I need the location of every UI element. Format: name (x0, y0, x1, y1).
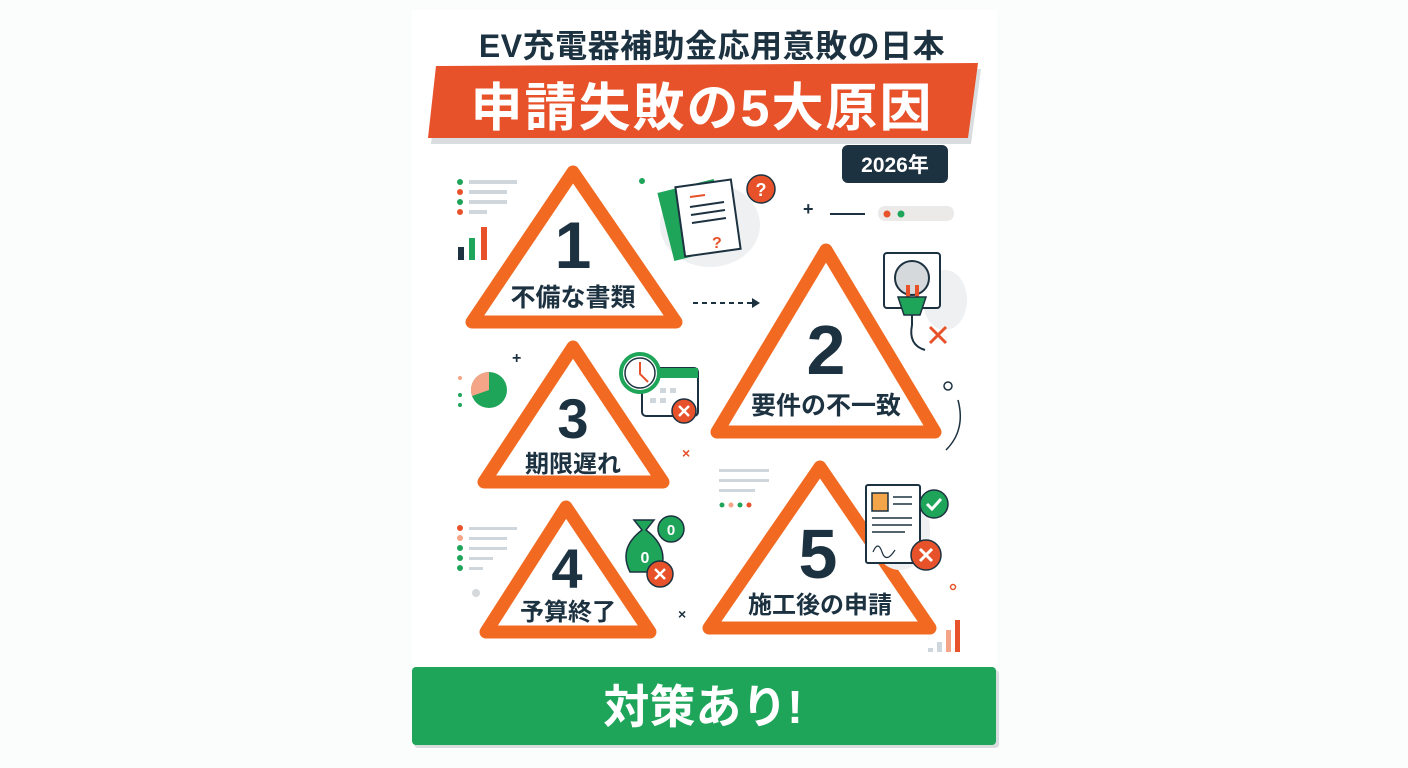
icon: documents with question (639, 175, 775, 267)
triangle 5: 施工後の申請 (748, 592, 892, 619)
icon: plug (884, 253, 967, 350)
icon: money bag (626, 516, 684, 587)
year badge (842, 145, 948, 183)
page panel (412, 10, 997, 750)
icon: money bag: 0 (667, 522, 675, 539)
decorative list left top (457, 179, 517, 215)
icon: money bag: 0 (641, 550, 650, 567)
icon: bar chart (458, 227, 487, 260)
triangle 2: 要件の不一致 (751, 392, 901, 420)
icon: pie chart (458, 350, 521, 408)
text: × (678, 606, 686, 622)
decorative plus and slider (803, 199, 954, 221)
year badge: 2026年 (861, 154, 929, 177)
banner: 申請失敗の5大原因 (471, 80, 933, 138)
triangle 3: 期限遅れ (525, 451, 621, 478)
triangle 5 (709, 467, 930, 628)
icon: application form (866, 485, 948, 570)
triangle 2: 2 (807, 311, 845, 389)
decorative lines mid right (719, 469, 769, 508)
decorative list left bottom (457, 525, 517, 597)
triangle 3: 3 (557, 387, 589, 450)
decorative circle and arrow right (944, 382, 960, 450)
triangle 4 (486, 507, 650, 632)
triangle 1: 1 (555, 208, 591, 282)
banner (428, 63, 981, 144)
icon: documents with question: ? (712, 235, 722, 252)
icon: pie chart: + (512, 350, 521, 367)
decorative plus and slider: + (803, 199, 814, 219)
green footer bar: 対策あり! (603, 681, 803, 733)
triangle 3 (484, 347, 663, 482)
triangle 2 (717, 250, 935, 432)
triangle 1 (472, 172, 676, 322)
arrow: dashed (693, 298, 760, 308)
green footer bar (412, 667, 999, 748)
icon: clock and calendar (621, 354, 698, 423)
title: EV充電器補助金応用意敗の日本 (479, 28, 945, 64)
triangle 5: 5 (799, 515, 837, 593)
text: × (682, 445, 690, 461)
triangle 4: 予算終了 (520, 599, 616, 626)
triangle 1: 不備な書類 (510, 284, 636, 312)
icon: small bars bottom right (928, 584, 960, 652)
triangle 4: 4 (551, 537, 583, 600)
icon: documents with question: ? (756, 180, 766, 200)
